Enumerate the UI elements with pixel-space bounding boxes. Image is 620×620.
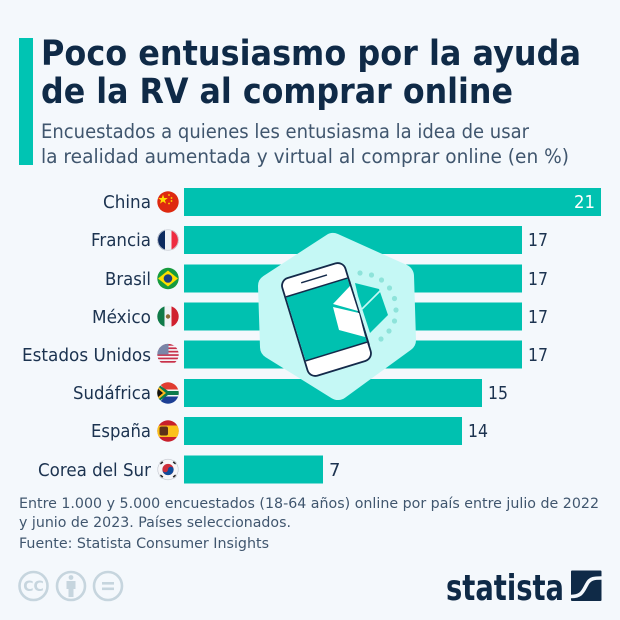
flag: China bbox=[157, 191, 179, 213]
flag: Mexico bbox=[157, 306, 179, 326]
value labels: 17 bbox=[528, 269, 548, 290]
flag: United States bbox=[157, 344, 179, 363]
subtitle: Encuestados a quienes les entusiasma la idea de usar bbox=[41, 120, 530, 143]
icon: phone with augmented-reality cube bbox=[270, 245, 404, 388]
footnote bbox=[19, 496, 599, 552]
title: Poco entusiasmo por la ayuda bbox=[41, 34, 581, 74]
bars bbox=[184, 188, 601, 484]
footnote: Entre 1.000 y 5.000 encuestados (18-64 años) online por país entre julio de 2022 bbox=[19, 496, 599, 512]
value labels: 7 bbox=[329, 460, 340, 481]
logo: statista: statista bbox=[446, 568, 564, 609]
value labels: 21 bbox=[574, 192, 595, 213]
accent bar bbox=[19, 38, 33, 165]
flag: Brazil bbox=[157, 267, 179, 290]
footnote: y junio de 2023. Países seleccionados. bbox=[19, 515, 291, 531]
footnote: Fuente: Statista Consumer Insights bbox=[19, 536, 269, 552]
country labels: Corea del Sur bbox=[38, 461, 152, 481]
bar chart bbox=[22, 188, 601, 484]
title: de la RV al comprar online bbox=[41, 72, 513, 112]
hexagon badge bbox=[270, 245, 404, 388]
country labels: Francia bbox=[91, 231, 151, 251]
dotted arc bbox=[357, 270, 399, 342]
phone body bbox=[280, 261, 373, 378]
value labels: 14 bbox=[468, 421, 488, 442]
flag: South Africa bbox=[157, 382, 179, 404]
subtitle bbox=[41, 120, 569, 168]
value labels: 17 bbox=[528, 230, 548, 251]
subtitle: la realidad aumentada y virtual al comprar online (en %) bbox=[41, 145, 569, 168]
country labels: España bbox=[91, 422, 151, 442]
country labels: México bbox=[92, 308, 151, 328]
country labels: China bbox=[103, 193, 151, 213]
title bbox=[41, 34, 581, 112]
value labels: 17 bbox=[528, 345, 548, 366]
value labels bbox=[329, 192, 595, 481]
flag: Spain bbox=[157, 420, 179, 443]
icon: creative commons licence bbox=[20, 572, 122, 600]
value labels: 15 bbox=[488, 383, 508, 404]
flag: France bbox=[157, 229, 180, 251]
logo mark bbox=[571, 570, 602, 601]
value labels: 17 bbox=[528, 307, 548, 328]
country labels: Estados Unidos bbox=[22, 346, 151, 366]
country labels: Sudáfrica bbox=[73, 384, 151, 404]
icon: creative commons licence: CC bbox=[23, 579, 44, 595]
flag: South Korea bbox=[157, 458, 179, 481]
country labels: Brasil bbox=[105, 270, 151, 290]
country labels bbox=[22, 193, 152, 481]
cube bbox=[333, 280, 388, 345]
